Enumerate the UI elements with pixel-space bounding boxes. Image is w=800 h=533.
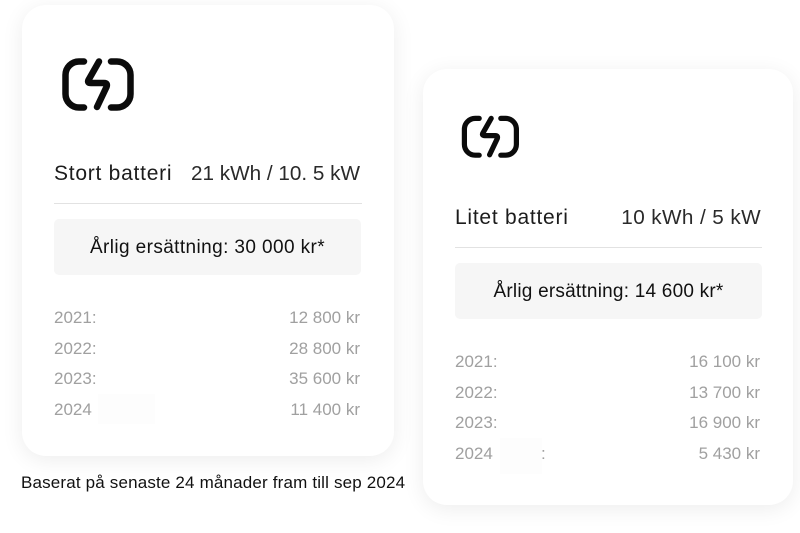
row: 2024 small <box>455 444 760 463</box>
row: 2023 small: 2023: <box>455 413 498 432</box>
panel: large battery <box>22 5 394 456</box>
callout: large battery annual compensation <box>54 219 361 275</box>
row: 2022 large: 28 800 kr <box>289 339 360 358</box>
row: 2022 small <box>455 383 760 402</box>
row: 2022 small: 13 700 kr <box>689 383 760 402</box>
callout: small battery annual compensation: Årlig ersättning: 14 600 kr* <box>493 281 724 302</box>
row: 2023 large: 2023: <box>54 369 97 388</box>
row: 2021 large <box>54 308 360 327</box>
row: 2024 large: 11 400 kr <box>290 400 360 419</box>
row: 2021 small: 2021: <box>455 352 498 371</box>
row: 2021 large: 12 800 kr <box>289 308 360 327</box>
row: 2024 small: 2024 <box>455 444 493 463</box>
panel: small battery <box>423 69 793 505</box>
row: 2024 large <box>54 400 360 419</box>
footnote: Baserat på senaste 24 månader fram till sep 2024 <box>21 473 405 492</box>
row: 2022 large <box>54 339 360 358</box>
row: 2024 small: 5 430 kr <box>699 444 760 463</box>
icon: battery charge <box>62 58 134 111</box>
row: 2021 small: 16 100 kr <box>689 352 760 371</box>
row: 2022 small: 2022: <box>455 383 498 402</box>
row: 2021 large: 2021: <box>54 308 97 327</box>
text: large battery specs: 21 kWh / 10. 5 kW <box>191 162 360 185</box>
row: 2023 small <box>455 413 760 432</box>
row: 2024 small: : <box>541 444 546 463</box>
heading: small battery name: Litet batteri <box>455 206 569 229</box>
callout: small battery annual compensation <box>455 263 762 319</box>
row: 2023 large: 35 600 kr <box>289 369 360 388</box>
text: small battery specs: 10 kWh / 5 kW <box>621 206 761 229</box>
row: 2021 small <box>455 352 760 371</box>
row: 2022 large: 2022: <box>54 339 97 358</box>
row: 2023 small: 16 900 kr <box>689 413 760 432</box>
row: 2024 large: 2024 <box>54 400 92 419</box>
callout: large battery annual compensation: Årlig ersättning: 30 000 kr* <box>90 237 325 258</box>
heading: large battery name: Stort batteri <box>54 162 172 185</box>
icon: battery charge <box>462 116 519 158</box>
row: 2023 large <box>54 369 360 388</box>
